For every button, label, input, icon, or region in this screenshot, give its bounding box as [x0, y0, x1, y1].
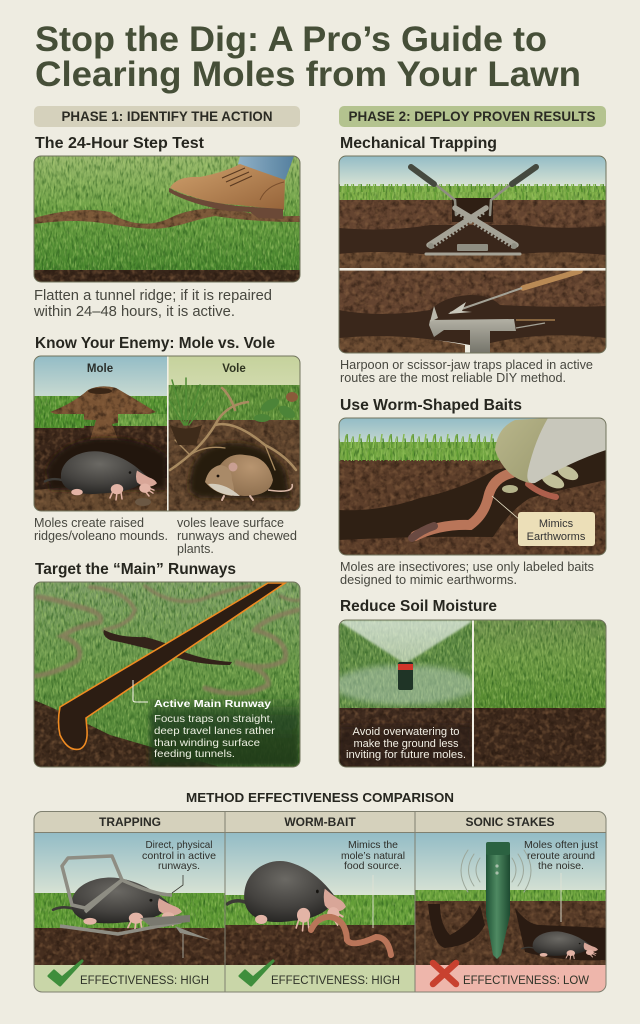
illustration: runway map [34, 582, 300, 767]
callout: mimics earthworms [518, 512, 595, 546]
table column: sonic stakes [415, 811, 606, 992]
illustration: mole side [34, 356, 167, 511]
caption: mole [34, 516, 168, 543]
title [35, 20, 581, 94]
panel: worm-shaped baits [339, 397, 606, 587]
title: Clearing Moles from Your Lawn [35, 55, 581, 94]
label: vole: Vole [222, 363, 246, 375]
caption: worm baits: Moles are insectivores; use only labeled baits [340, 560, 594, 574]
table column: trapping [34, 811, 225, 992]
status: worm-bait: EFFECTIVENESS: HIGH [271, 975, 400, 987]
label: mole: Mole [87, 363, 113, 375]
callout: active main runway: feeding tunnels. [154, 749, 235, 760]
panel: soil moisture [333, 598, 606, 767]
phase 1 banner: PHASE 1: IDENTIFY THE ACTION [62, 109, 272, 124]
text: sonic note: reroute around [527, 850, 595, 862]
panel: mole vs vole [34, 335, 300, 556]
callout: mimics earthworms: Mimics [539, 518, 574, 530]
table column: sonic stakes: SONIC STAKES [465, 815, 555, 829]
text: worm-bait note: food source. [344, 860, 402, 872]
caption: vole [177, 516, 297, 556]
caption: worm baits [340, 560, 594, 587]
heading: mole vs vole: Know Your Enemy: Mole vs. Vole [35, 335, 275, 352]
heading: step test: The 24-Hour Step Test [35, 135, 205, 152]
caption: vole: plants. [177, 542, 214, 556]
callout: avoid overwatering: Avoid overwatering to [352, 726, 460, 738]
text: sonic note: Moles often just [524, 839, 598, 851]
caption: mechanical trapping [340, 358, 593, 385]
panel: 24-hour step test [33, 135, 300, 320]
illustration: vole side [168, 356, 300, 511]
callout: avoid overwatering [346, 726, 466, 761]
heading: method comparison: METHOD EFFECTIVENESS COMPARISON [186, 790, 454, 805]
caption: mole: Moles create raised [34, 516, 144, 530]
caption: vole: runways and chewed [177, 529, 297, 543]
panel: main runways [34, 561, 300, 767]
text: sonic note: the noise. [538, 860, 584, 872]
text: worm-bait note: Mimics the [348, 839, 398, 851]
callout: active main runway: Focus traps on straight, [154, 714, 273, 725]
text: worm-bait note: mole’s natural [341, 850, 405, 862]
panel: mechanical trapping [339, 135, 606, 385]
heading: soil moisture: Reduce Soil Moisture [340, 598, 497, 615]
caption: step test [33, 288, 272, 320]
title: Stop the Dig: A Pro’s Guide to [35, 20, 547, 59]
table column: worm-bait [225, 811, 415, 992]
text: sonic note [524, 840, 598, 869]
heading: worm baits: Use Worm-Shaped Baits [340, 397, 522, 414]
status: sonic: EFFECTIVENESS: LOW [463, 975, 589, 987]
caption: step test: within 24–48 hours, it is active. [33, 304, 235, 320]
icon: check [49, 961, 82, 985]
illustration: sprinkler and dry lawn [333, 620, 606, 767]
callout: avoid overwatering: make the ground less [354, 738, 459, 750]
icon: check [240, 961, 273, 985]
illustration: scissor trap [339, 156, 606, 353]
callout: active main runway: deep travel lanes rather [154, 726, 276, 737]
text: trapping note: Direct, physical [146, 839, 212, 851]
caption: mechanical trapping: routes are the most reliable DIY method. [340, 371, 566, 385]
table column: trapping: TRAPPING [99, 815, 161, 829]
text: trapping note [142, 839, 216, 872]
caption: vole: voles leave surface [177, 516, 284, 530]
text: trapping note: control in active [142, 850, 216, 862]
phase 1 banner [34, 106, 300, 127]
caption: worm baits: designed to mimic earthworms. [340, 573, 517, 587]
text: worm-bait note [342, 840, 404, 869]
illustration: boot on tunnel ridge [34, 156, 300, 282]
text: trapping note: runways. [158, 860, 200, 872]
callout: active main runway: Active Main Runway [154, 698, 271, 710]
illustration: gloved hand with worm [339, 418, 606, 555]
heading: mechanical trapping: Mechanical Trapping [340, 135, 497, 152]
heading: main runways: Target the “Main” Runways [35, 561, 236, 578]
callout: mimics earthworms: Earthworms [527, 531, 586, 543]
status: trapping: EFFECTIVENESS: HIGH [80, 975, 209, 987]
callout: avoid overwatering: inviting for future moles. [346, 749, 466, 761]
callout: active main runway [154, 698, 276, 760]
caption: step test: Flatten a tunnel ridge; if it is repaired [34, 288, 272, 304]
phase 2 banner: PHASE 2: DEPLOY PROVEN RESULTS [348, 109, 596, 124]
comparison table [34, 811, 606, 992]
caption: mechanical trapping: Harpoon or scissor-jaw traps placed in active [340, 358, 593, 372]
callout: active main runway: than winding surface [154, 738, 260, 749]
phase 2 banner [339, 106, 606, 127]
table column: worm-bait: WORM-BAIT [284, 815, 356, 829]
icon: cross [433, 963, 456, 984]
caption: mole: ridges/voleano mounds. [34, 529, 168, 543]
